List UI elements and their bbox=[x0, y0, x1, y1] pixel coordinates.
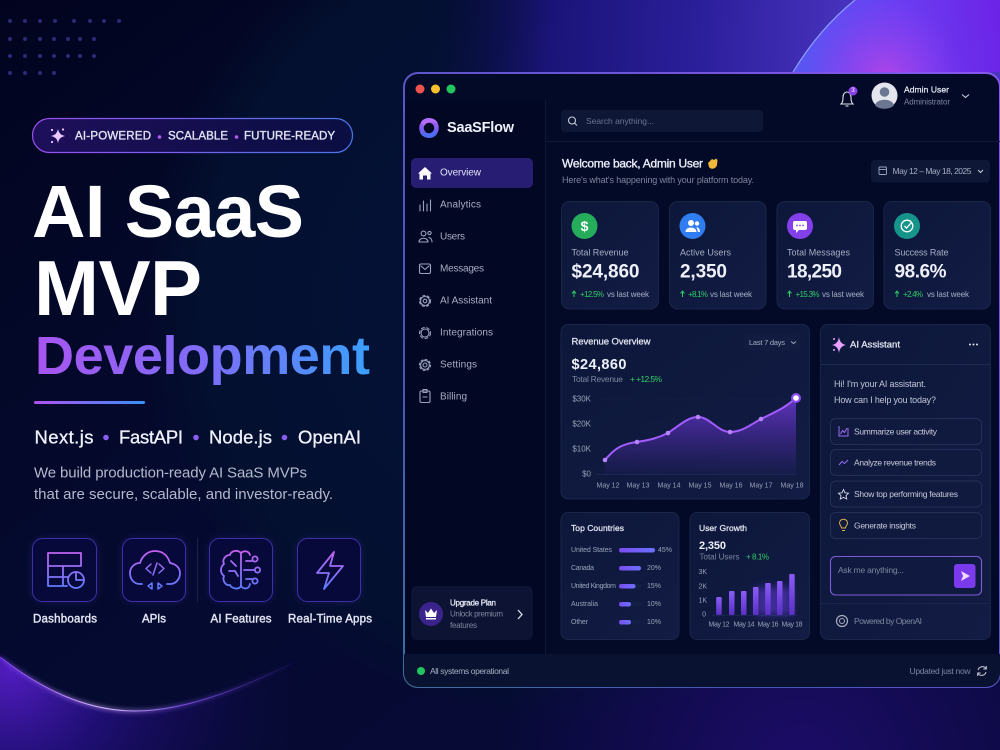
logo: SaaSFlow bbox=[447, 120, 515, 136]
prompt: top features: Show top performing features bbox=[854, 489, 958, 499]
description bbox=[34, 464, 333, 503]
line chart: May 14 bbox=[658, 482, 681, 490]
panel: user growth: 2,350 bbox=[699, 540, 726, 552]
line chart: May 17 bbox=[750, 482, 773, 490]
icon: lightning bolt bbox=[317, 552, 343, 589]
stat card: Active Users: 2,350 bbox=[680, 262, 727, 282]
nav: Settings: Settings bbox=[440, 360, 477, 370]
line chart: May 12 bbox=[597, 482, 620, 490]
bar chart: May 12 bbox=[708, 622, 730, 628]
panel: AI assistant bbox=[820, 324, 990, 640]
stat card: Active Users: +8.1% bbox=[688, 290, 708, 299]
panel: top countries: Top Countries bbox=[571, 523, 624, 533]
prompt: top features bbox=[830, 481, 982, 507]
row: Australia: Australia bbox=[571, 601, 598, 608]
row: Australia bbox=[571, 601, 661, 608]
nav: Settings bbox=[420, 360, 477, 370]
stat card: Success Rate: vs last week bbox=[927, 290, 970, 299]
badge: tagline pill bbox=[32, 118, 352, 152]
title bbox=[32, 170, 370, 386]
chat input bbox=[830, 556, 982, 595]
panel: user growth: Total Users bbox=[700, 552, 740, 562]
panel: user growth bbox=[690, 512, 810, 640]
row: United States bbox=[571, 547, 672, 554]
assistant greeting: Hi! I'm your AI assistant. bbox=[834, 379, 926, 389]
feature: AI Features: AI Features bbox=[210, 614, 272, 626]
welcome heading bbox=[562, 156, 754, 185]
nav: AI Assistant: AI Assistant bbox=[440, 296, 492, 306]
prompt: analyze bbox=[830, 450, 982, 476]
status bar bbox=[404, 654, 1000, 687]
nav: Overview (active) bbox=[411, 158, 533, 188]
assistant greeting bbox=[834, 379, 936, 405]
stat card: Active Users: Active Users bbox=[680, 248, 732, 258]
bar chart: 0 bbox=[702, 612, 706, 618]
line chart bbox=[572, 393, 804, 490]
title: MVP bbox=[34, 244, 202, 332]
prompt: insights: Generate insights bbox=[854, 520, 916, 530]
nav: Analytics bbox=[420, 200, 481, 211]
stat card: Total Revenue: $24,860 bbox=[572, 262, 640, 282]
panel: revenue overview: $24,860 bbox=[572, 357, 626, 373]
window controls bbox=[416, 84, 456, 94]
stat card: Total Revenue: vs last week bbox=[607, 290, 650, 299]
nav: Analytics: Analytics bbox=[440, 200, 481, 210]
powered by: Powered by OpenAI bbox=[854, 616, 922, 626]
period selector: Last 7 days bbox=[749, 338, 785, 347]
icon: cloud code bbox=[130, 551, 180, 589]
nav: Overview (active): Overview bbox=[440, 168, 482, 178]
prompt: analyze: Analyze revenue trends bbox=[854, 458, 936, 468]
search box: Search anything... bbox=[586, 116, 654, 126]
row: United Kingdom: 15% bbox=[647, 583, 661, 590]
tech stack line: OpenAI bbox=[298, 426, 361, 448]
line chart: $20K bbox=[572, 420, 592, 428]
icon: brain bbox=[221, 551, 260, 589]
stat card: Active Users: vs last week bbox=[710, 290, 753, 299]
status bar: Updated just now bbox=[910, 666, 971, 676]
top bar bbox=[546, 82, 1000, 142]
period selector bbox=[744, 334, 801, 350]
bar chart: May 18 bbox=[782, 622, 803, 628]
bar chart: 3K bbox=[698, 569, 707, 576]
row: United Kingdom: United Kingdom bbox=[571, 583, 616, 590]
stat card: Total Revenue bbox=[562, 202, 658, 309]
date range picker bbox=[871, 160, 990, 182]
prompt: insights bbox=[830, 512, 982, 538]
panel: user growth: User Growth bbox=[699, 523, 747, 533]
upgrade plan card: features bbox=[450, 621, 477, 630]
stat card: Active Users bbox=[670, 202, 766, 309]
upgrade plan card: Unlock premium bbox=[450, 610, 503, 618]
stat card: Total Revenue: Total Revenue bbox=[572, 248, 628, 258]
stat card: Total Messages: +15.3% bbox=[796, 290, 820, 299]
tech stack line: Node.js bbox=[209, 426, 272, 448]
search box bbox=[561, 110, 763, 132]
icon: dashboard bbox=[48, 553, 84, 588]
line chart: May 16 bbox=[720, 482, 743, 490]
stat card: Total Revenue: +12.5% bbox=[580, 290, 604, 299]
tech stack line bbox=[34, 426, 361, 448]
feature: APIs: APIs bbox=[142, 614, 166, 626]
description: We build production-ready AI SaaS MVPs bbox=[34, 464, 307, 482]
welcome heading: Here's what's happening with your platform today. bbox=[562, 175, 754, 185]
row: Other: Other bbox=[571, 619, 589, 626]
feature: Dashboards: Dashboards bbox=[33, 614, 97, 626]
nav: Billing bbox=[420, 390, 467, 402]
stat card: Success Rate bbox=[884, 202, 990, 309]
row: Canada: Canada bbox=[571, 565, 594, 572]
title: Development bbox=[35, 326, 370, 386]
logo bbox=[420, 118, 515, 138]
stat card: Success Rate: 98.6% bbox=[894, 262, 947, 282]
user profile: Administrator bbox=[904, 98, 950, 106]
assistant header: AI Assistant bbox=[850, 340, 900, 350]
prompt: summarize bbox=[830, 418, 982, 444]
bottom left glowing wave bbox=[0, 650, 320, 750]
nav: Messages: Messages bbox=[440, 264, 484, 274]
upgrade plan card: Upgrade Plan bbox=[450, 598, 496, 608]
bar chart: May 14 bbox=[734, 622, 755, 628]
row: United States: United States bbox=[571, 547, 612, 554]
title: AI SaaS bbox=[32, 170, 304, 253]
assistant greeting: How can I help you today? bbox=[834, 395, 936, 405]
row: United States: 45% bbox=[658, 547, 672, 554]
bar chart: 2K bbox=[698, 584, 707, 590]
feature: AI Features bbox=[198, 538, 272, 626]
stat card: Success Rate: +2.4% bbox=[903, 290, 923, 299]
feature: Real-Time Apps bbox=[288, 538, 372, 626]
description: that are secure, scalable, and investor-ready. bbox=[34, 486, 333, 503]
notification bell bbox=[841, 86, 858, 106]
line chart: $0 bbox=[582, 470, 592, 478]
title underline bbox=[34, 401, 145, 404]
panel: top countries bbox=[561, 512, 679, 640]
badge: tagline pill: SCALABLE bbox=[168, 130, 228, 142]
panel: revenue overview: Total Revenue bbox=[572, 374, 623, 384]
stat card: Total Messages: vs last week bbox=[822, 290, 865, 299]
user profile: Admin User bbox=[904, 84, 949, 94]
dashboard window bbox=[404, 73, 1000, 687]
stat card: Total Messages: 18,250 bbox=[787, 262, 842, 282]
notification bell: 3 bbox=[851, 88, 855, 94]
nav: Messages bbox=[420, 264, 484, 274]
assistant header bbox=[832, 337, 978, 353]
sidebar bbox=[405, 100, 546, 654]
tech stack line: FastAPI bbox=[119, 426, 183, 448]
row: Other bbox=[571, 619, 661, 626]
status bar: All systems operational bbox=[430, 666, 509, 676]
feature: Dashboards bbox=[32, 538, 97, 626]
line chart: $30K bbox=[572, 394, 592, 404]
line chart: May 18 bbox=[781, 482, 804, 490]
row: Canada: 20% bbox=[647, 565, 661, 572]
panel: user growth: + 8.1% bbox=[746, 552, 769, 562]
line chart: $10K bbox=[572, 444, 592, 454]
prompt: summarize: Summarize user activity bbox=[854, 426, 938, 436]
panel: revenue overview: + +12.5% bbox=[630, 374, 662, 384]
stat card: Success Rate: Success Rate bbox=[894, 248, 948, 258]
bar chart: May 16 bbox=[758, 622, 779, 628]
stat card: Total Revenue: $ bbox=[581, 218, 589, 234]
nav: Users: Users bbox=[440, 232, 465, 242]
bar chart: 1K bbox=[698, 598, 707, 604]
line chart: May 13 bbox=[627, 482, 650, 490]
feature: Real-Time Apps: Real-Time Apps bbox=[288, 614, 372, 626]
date range picker: May 12 – May 18, 2025 bbox=[892, 166, 972, 176]
stat card: Total Messages: Total Messages bbox=[787, 248, 850, 258]
panel: revenue overview: Revenue Overview bbox=[572, 336, 651, 348]
row: United Kingdom bbox=[571, 583, 661, 590]
nav: Users bbox=[419, 231, 465, 242]
upgrade plan card bbox=[411, 586, 533, 640]
dot pattern bbox=[8, 19, 121, 75]
tech stack line: Next.js bbox=[34, 426, 94, 448]
nav: Integrations: Integrations bbox=[440, 328, 493, 338]
row: Australia: 10% bbox=[647, 601, 661, 608]
line chart: May 15 bbox=[689, 482, 712, 490]
top right purple arc bbox=[793, 0, 1000, 72]
badge: tagline pill: AI-POWERED bbox=[75, 130, 151, 142]
nav: Billing: Billing bbox=[440, 392, 467, 402]
stat card: Total Messages bbox=[777, 202, 874, 309]
welcome heading: Welcome back, Admin User bbox=[562, 156, 703, 170]
row: Other: 10% bbox=[647, 619, 661, 626]
row: Canada bbox=[571, 565, 661, 572]
panel: revenue overview bbox=[561, 324, 810, 499]
feature: APIs bbox=[122, 538, 186, 626]
bar chart bbox=[698, 569, 803, 628]
chat input: Ask me anything... bbox=[838, 565, 904, 575]
user profile bbox=[872, 82, 969, 109]
badge: tagline pill: FUTURE-READY bbox=[244, 130, 335, 142]
